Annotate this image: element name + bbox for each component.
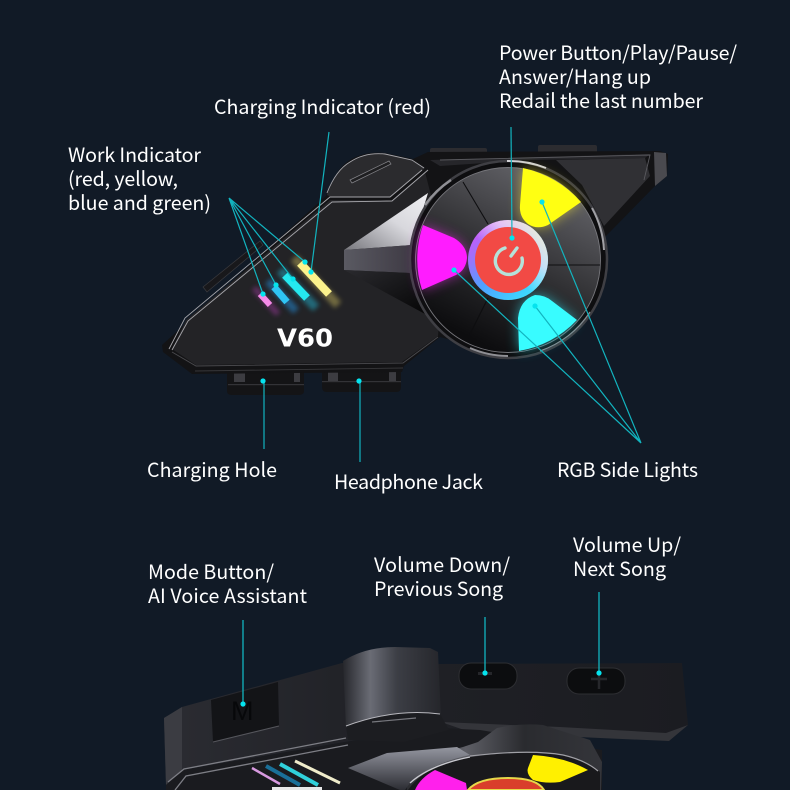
- label: headphone jack: Headphone Jack: [334, 466, 483, 495]
- side view light bars: [252, 761, 340, 785]
- label: volume up: [573, 529, 681, 582]
- label: power button: Redail the last number: [499, 85, 703, 114]
- callout dots: top view: [260, 199, 545, 384]
- work indicator light bars: [254, 258, 338, 314]
- volume down button: [459, 663, 517, 689]
- hump ledge: [346, 713, 446, 728]
- hump slot: [350, 161, 391, 183]
- callout lines: side view: [243, 592, 599, 704]
- side view logo fragment: [272, 787, 322, 790]
- label: volume down: Previous Song: [374, 573, 503, 602]
- callout line top stub: [598, 592, 600, 600]
- device: top view: [162, 127, 668, 462]
- body edge highlights: [169, 154, 650, 371]
- right wing tip: [654, 152, 667, 186]
- left chamfer: [164, 707, 182, 785]
- wall lower lip: [441, 722, 688, 741]
- label: mode button: AI Voice Assistant: [148, 580, 308, 609]
- side view power button: [468, 778, 544, 790]
- label: volume up: Volume Up/: [573, 529, 681, 558]
- hump panel: [327, 154, 425, 197]
- yellow light: [520, 168, 581, 227]
- side wall: [182, 663, 688, 770]
- label: work indicator: [68, 139, 211, 216]
- label: volume down: Volume Down/: [374, 549, 510, 578]
- label: volume up: Next Song: [573, 553, 666, 582]
- device: side view: [164, 592, 688, 790]
- cyan light: [518, 295, 577, 351]
- hump slot: [372, 718, 416, 722]
- hump ledge highlight: [346, 712, 440, 726]
- top strip: [430, 154, 650, 166]
- label: power button: [499, 37, 737, 114]
- dial face: [416, 168, 600, 352]
- label: power button: Power Button/Play/Pause/: [499, 37, 737, 66]
- M button: [211, 682, 279, 742]
- power icon: [495, 248, 522, 274]
- device jacks: [227, 366, 401, 395]
- device side button strip: [203, 241, 263, 292]
- label: charging indicator: Charging Indicator (red): [214, 91, 431, 120]
- cylinder hump: [343, 647, 441, 728]
- label: power button: Answer/Hang up: [499, 61, 651, 90]
- label: RGB side lights: RGB Side Lights: [557, 454, 698, 483]
- side view yellow light: [528, 755, 588, 783]
- edge highlight: [168, 738, 348, 790]
- device body silhouette: [162, 151, 668, 374]
- dial housing: [410, 161, 607, 358]
- label: work indicator: (red, yellow,: [68, 163, 178, 192]
- dial rim highlights: [416, 161, 604, 356]
- callout lines: top view: [229, 127, 641, 462]
- side view dial: [408, 752, 600, 790]
- magenta light: [417, 225, 467, 290]
- label: work indicator: Work Indicator: [68, 139, 201, 168]
- callout dots: side view: [240, 670, 602, 707]
- volume up button: [567, 668, 625, 694]
- device top buttons: [430, 145, 597, 162]
- V60 logo: V60: [277, 324, 333, 352]
- right wing: [556, 158, 650, 226]
- lower face: [166, 728, 602, 790]
- M button edge: [213, 726, 279, 742]
- label: mode button: Mode Button/: [148, 556, 274, 585]
- label: work indicator: blue and green): [68, 187, 211, 216]
- M label: M: [231, 696, 254, 726]
- device main face: [172, 172, 445, 365]
- label: mode button: [148, 556, 308, 609]
- label: volume down: [374, 549, 510, 602]
- side view dome: [407, 724, 602, 790]
- label: charging hole: Charging Hole: [147, 454, 277, 483]
- power button: [468, 220, 548, 300]
- cone: [344, 193, 428, 314]
- side view magenta light: [415, 770, 467, 790]
- dial sector lines: [463, 182, 600, 338]
- side view cone: [348, 747, 470, 790]
